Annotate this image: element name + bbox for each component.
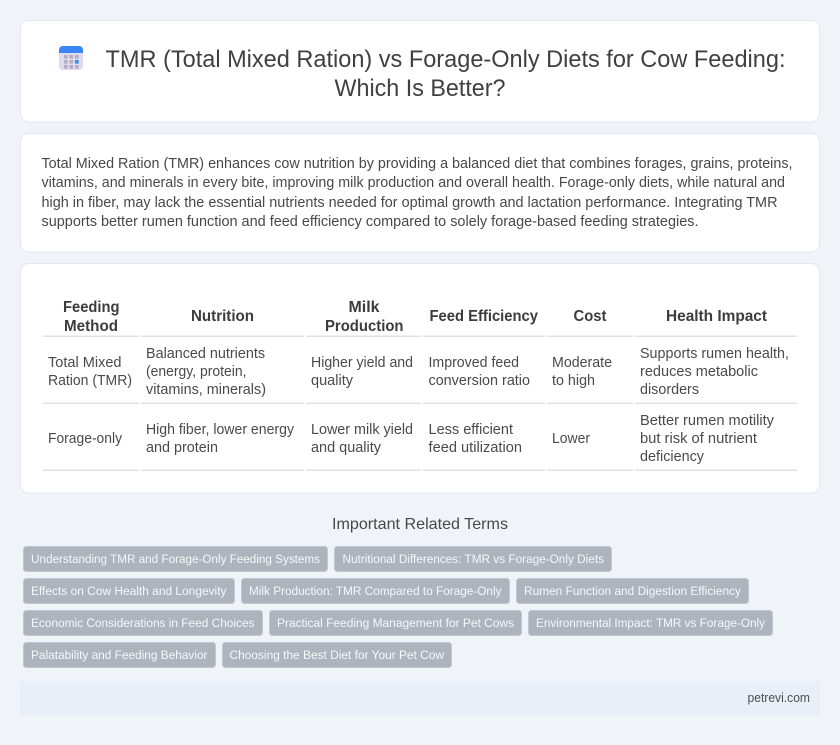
table header row: Production <box>325 318 404 335</box>
table header row: Feed Efficiency <box>430 308 538 325</box>
table row: Total Mixed Ration: Supports rumen health, <box>640 346 789 362</box>
table row: Forage-only: Less efficient <box>428 422 513 438</box>
table header row: Method <box>64 318 118 335</box>
panel: title header <box>20 20 820 122</box>
table row: Forage-only: and quality <box>311 440 382 456</box>
table row: Forage-only: Lower milk yield <box>311 422 413 438</box>
table row: Total Mixed Ration: Balanced nutrients <box>146 346 265 362</box>
table row: Forage-only <box>48 413 775 465</box>
tag: Environmental Impact: TMR vs Forage-Only <box>536 616 766 630</box>
table header row: Nutrition <box>191 308 254 325</box>
title: Which Is Better? <box>334 75 506 102</box>
table row: Total Mixed Ration: disorders <box>640 382 699 398</box>
tag <box>24 610 262 636</box>
table row: Total Mixed Ration: quality <box>311 373 354 389</box>
table header row: Milk <box>348 299 380 316</box>
text block: summary: Total Mixed Ration (TMR) enhances cow nutrition by providing a balanced diet that combines forages, grains, proteins, <box>42 156 792 172</box>
table header row: Cost <box>574 308 607 325</box>
table row: Total Mixed Ration: Improved feed <box>428 355 519 371</box>
text block: summary: high in fiber, may lack the essential nutrients needed for optimal growth and lactation performance. Integrating TMR <box>42 195 778 211</box>
text block: summary: supports better rumen function and feed efficiency compared to solely forage-based feeding strategies. <box>42 214 698 230</box>
table row: Forage-only: Lower <box>552 431 590 447</box>
table row: Forage-only: feed utilization <box>428 440 522 456</box>
tag: Rumen Function and Digestion Efficiency <box>524 584 742 598</box>
tag <box>24 578 234 604</box>
table header row: Health Impact <box>666 308 768 325</box>
tag: Practical Feeding Management for Pet Cows <box>277 616 514 630</box>
table row: Total Mixed Ration: reduces metabolic <box>640 364 758 380</box>
table row: Forage-only: but risk of nutrient <box>640 431 757 447</box>
table row: Total Mixed Ration: vitamins, minerals) <box>146 382 266 398</box>
tag <box>528 610 772 636</box>
tag: Economic Considerations in Feed Choices <box>31 616 254 630</box>
table row: Total Mixed Ration: Moderate <box>552 355 612 371</box>
table row: Total Mixed Ration <box>48 346 789 398</box>
tag <box>24 546 328 572</box>
table row: Total Mixed Ration: conversion ratio <box>428 373 530 389</box>
table row: Total Mixed Ration: (energy, protein, <box>146 364 246 380</box>
table row: Total Mixed Ration: Ration (TMR) <box>48 373 132 389</box>
table row: Forage-only: deficiency <box>640 449 705 465</box>
tag <box>334 546 612 572</box>
table header row <box>63 299 768 335</box>
heading: related terms: Important Related Terms <box>332 516 508 533</box>
tag <box>270 610 522 636</box>
panel: related term tags <box>24 546 772 668</box>
tag: Understanding TMR and Forage-Only Feeding Systems <box>31 552 320 566</box>
panel: comparison table <box>20 264 820 493</box>
tag <box>24 642 216 668</box>
tag: Milk Production: TMR Compared to Forage-Only <box>249 584 502 598</box>
tag: Choosing the Best Diet for Your Pet Cow <box>230 648 444 662</box>
table row: Forage-only: Forage-only <box>48 431 123 447</box>
icon: calendar <box>59 46 83 70</box>
title: TMR (Total Mixed Ration) vs Forage-Only Diets for Cow Feeding: <box>106 46 786 73</box>
footer <box>20 681 820 715</box>
tag <box>516 578 748 604</box>
table row: Total Mixed Ration: Total Mixed <box>48 355 122 371</box>
table row: Total Mixed Ration: to high <box>552 373 595 389</box>
text block: summary <box>42 156 792 230</box>
table row: Total Mixed Ration: Higher yield and <box>311 355 413 371</box>
panel: summary paragraph <box>20 134 820 252</box>
tag: Effects on Cow Health and Longevity <box>31 584 227 598</box>
tag <box>222 642 452 668</box>
tag: Nutritional Differences: TMR vs Forage-Only Diets <box>342 552 604 566</box>
table header row: Feeding <box>63 299 120 316</box>
table row: Forage-only: Better rumen motility <box>640 413 775 429</box>
table row: Forage-only: High fiber, lower energy <box>146 422 295 438</box>
table row: Forage-only: and protein <box>146 440 218 456</box>
title <box>106 46 786 102</box>
tag <box>242 578 510 604</box>
footer: petrevi.com <box>748 690 810 705</box>
text block: summary: vitamins, and minerals in every bite, improving milk production and overall health. Forage-only diets, while natural and <box>42 175 785 191</box>
tag: Palatability and Feeding Behavior <box>31 648 208 662</box>
